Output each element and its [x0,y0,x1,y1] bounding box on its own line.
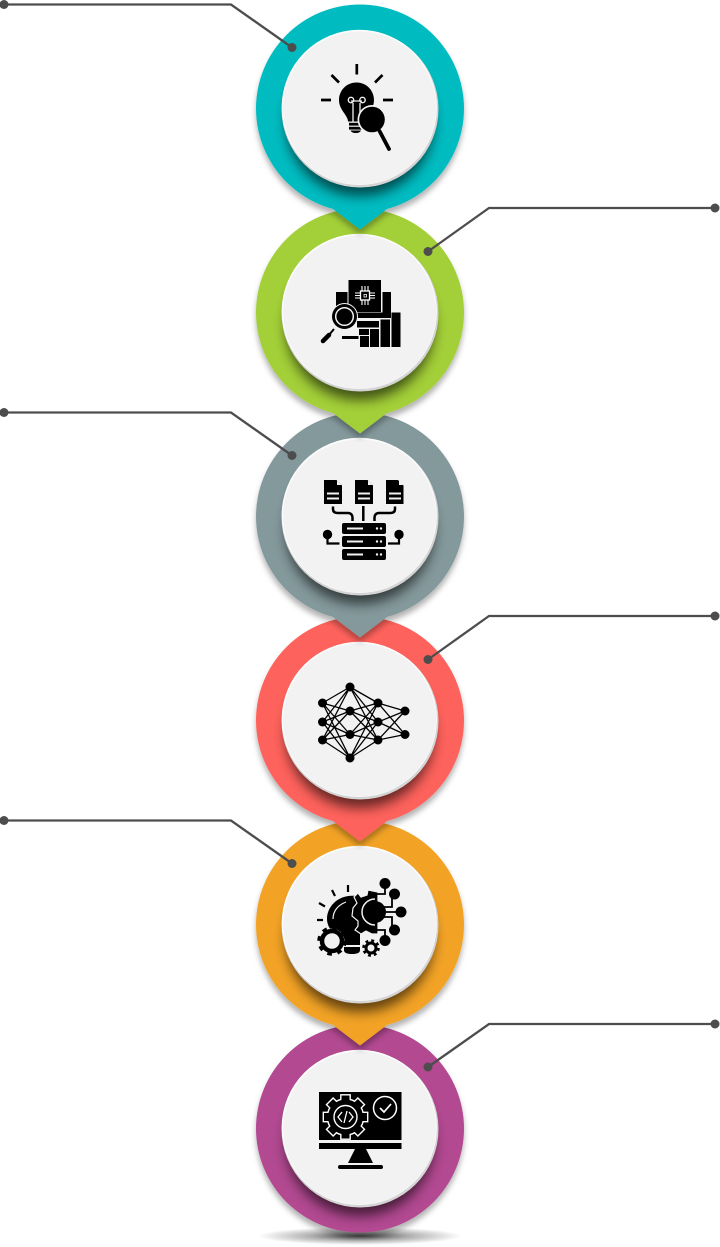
badge: purple circle [256,1024,464,1232]
inner disc 5 [282,846,438,1012]
badge: green pin [256,208,464,434]
leader line 2 [424,204,720,256]
icon: bulb, gears and circuit [317,878,406,955]
icon: monitor with code gear [319,1092,402,1169]
icon: neural network [318,682,410,762]
badge: grey pin [256,412,464,638]
leader line 4 [424,612,720,664]
icon: documents to server [323,480,404,560]
step 4: red [256,612,720,842]
step 1: teal [0,0,464,230]
icon: light bulb with magnifier [321,64,393,149]
leader line 6 [424,1020,720,1072]
floor shadow [258,1227,462,1245]
badge: orange pin [256,820,464,1046]
step 3: grey [0,408,464,638]
inner disc 2 [282,234,438,400]
inner disc 3 [282,438,438,604]
leader line 1 [0,0,296,52]
inner disc 6 [282,1050,438,1216]
inner disc 1 [282,30,438,196]
step 6: purple [256,1020,720,1232]
badge: teal pin [256,4,464,230]
icon: data analysis with chip and chart [323,280,400,347]
step 2: green [256,204,720,434]
badge: red pin [256,616,464,842]
leader line 5 [0,816,296,868]
leader line 3 [0,408,296,460]
step 5: orange [0,816,464,1046]
inner disc 4 [282,642,438,808]
